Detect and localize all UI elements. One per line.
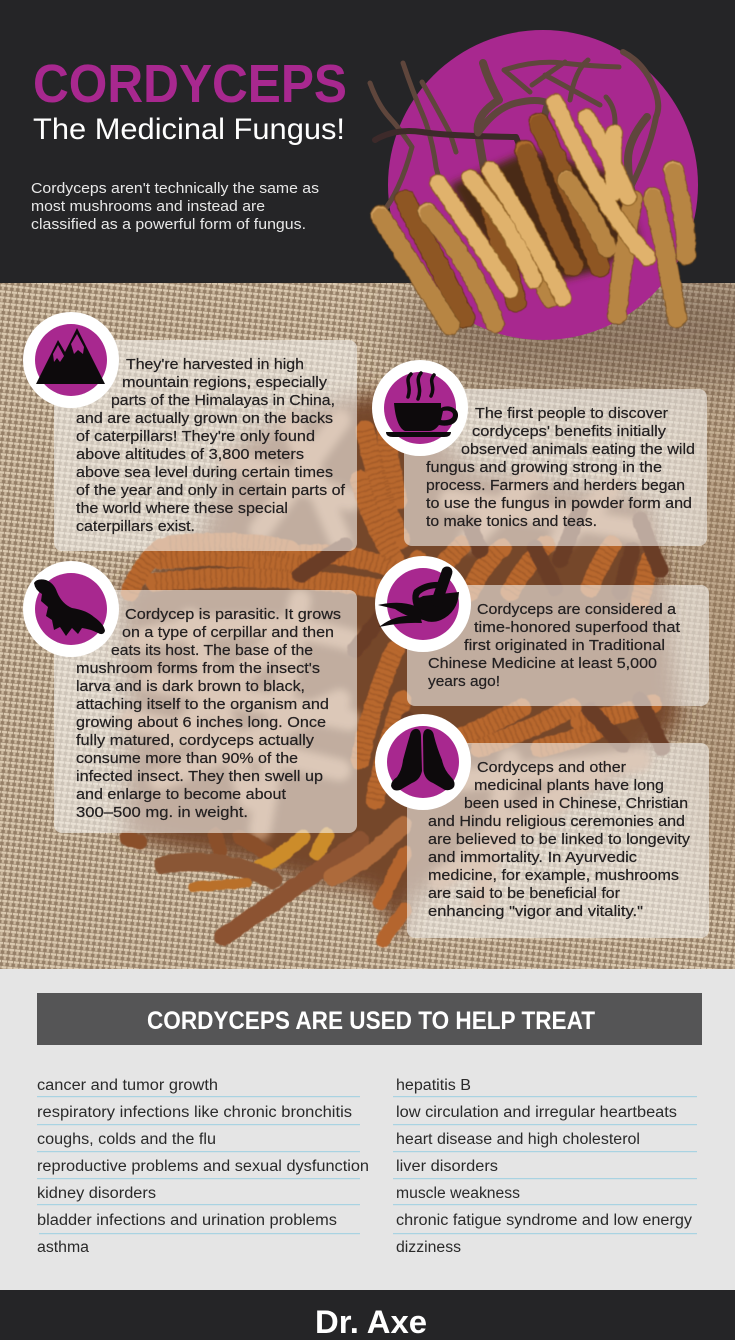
text block: first originated in Traditional [464, 637, 665, 654]
text block: They're harvested in high [126, 356, 304, 373]
panel: superfood [407, 585, 709, 706]
text block [428, 601, 681, 690]
panel: parasitic [54, 590, 357, 833]
text block: Cordycep is parasitic. It grows [125, 606, 341, 623]
text block: and immortality. In Ayurvedic [428, 849, 638, 866]
icon: caterpillar [23, 561, 119, 657]
list: left column: coughs, colds and the flu [37, 1131, 216, 1148]
list: left column: respiratory infections like chronic bronchitis [37, 1104, 352, 1121]
card [54, 590, 357, 833]
text block: 300–500 mg. in weight. [76, 804, 248, 821]
text block: above sea level during certain times [76, 464, 333, 481]
card [54, 340, 357, 551]
text block: on a type of cerpillar and then [122, 624, 334, 641]
text block: the world where these special [76, 500, 288, 517]
text block: Cordyceps are considered a [477, 601, 677, 618]
text block: to make tonics and teas. [426, 513, 597, 530]
text block [428, 759, 691, 920]
section heading bar [37, 993, 702, 1045]
list: left column: reproductive problems and sexual dysfunction [37, 1158, 369, 1175]
text block [76, 606, 341, 821]
text block [76, 356, 346, 535]
intro text: classified as a powerful form of fungus. [31, 216, 306, 233]
text block: medicinal plants have long [474, 777, 664, 794]
panel: first people to discover [404, 389, 707, 546]
card [407, 743, 709, 938]
text block: medicine, for example, mushrooms [428, 867, 679, 884]
pink circle behind fungus [388, 30, 698, 340]
text block: mountain regions, especially [122, 374, 328, 391]
title: CORDYCEPS [33, 54, 347, 114]
text block [426, 405, 695, 530]
text block: and Hindu religious ceremonies and [428, 813, 685, 830]
text block: of caterpillars! They're only found [76, 428, 315, 445]
list: right column: chronic fatigue syndrome and low energy [396, 1212, 692, 1229]
text block: The first people to discover [475, 405, 668, 422]
text block: of the year and only in certain parts of [76, 482, 346, 499]
text block: Chinese Medicine at least 5,000 [428, 655, 657, 672]
text block: parts of the Himalayas in China, [111, 392, 335, 409]
text block: and are actually grown on the backs [76, 410, 333, 427]
text block: mushroom forms from the insect's [76, 660, 320, 677]
list: right column [393, 1077, 697, 1256]
list: left column: kidney disorders [37, 1185, 156, 1202]
list: right column: low circulation and irregular heartbeats [396, 1104, 677, 1121]
panel: harvested in mountains [54, 340, 357, 551]
text block: infected insect. They then swell up [76, 768, 323, 785]
panel: religious ceremonies [407, 743, 709, 938]
text block: observed animals eating the wild [461, 441, 695, 458]
text block: years ago! [428, 673, 500, 690]
text block: larva and is dark brown to black, [76, 678, 305, 695]
text block: fully matured, cordyceps actually [76, 732, 315, 749]
worms below lower-left panel [127, 825, 405, 940]
card [404, 389, 707, 546]
text block: process. Farmers and herders began [426, 477, 685, 494]
icon: mountains [23, 312, 119, 408]
icon: steaming cup [372, 360, 468, 456]
list: left column: asthma [37, 1239, 89, 1256]
text block: and enlarge to become about [76, 786, 287, 803]
text block: been used in Chinese, Christian [464, 795, 688, 812]
list: right column: liver disorders [396, 1158, 498, 1175]
card [407, 585, 709, 706]
footer [0, 1290, 735, 1340]
fungus specimens photo [370, 52, 686, 325]
list: right column: dizziness [396, 1239, 461, 1256]
dark fungus stems [370, 52, 658, 213]
section heading bar: CORDYCEPS ARE USED TO HELP TREAT [147, 1007, 595, 1035]
intro text [31, 180, 319, 233]
text block: Cordyceps and other [477, 759, 626, 776]
text block: attaching itself to the organism and [76, 696, 329, 713]
list: right column: muscle weakness [396, 1185, 520, 1202]
text block: fungus and growing strong in the [426, 459, 662, 476]
icon: praying hands [375, 714, 471, 810]
list: right column: hepatitis B [396, 1077, 471, 1094]
intro text: Cordyceps aren't technically the same as [31, 180, 319, 197]
orange fungus bodies [405, 123, 600, 318]
text block: enhancing "vigor and vitality." [428, 903, 643, 920]
shadow backing between fungus bodies [450, 150, 640, 280]
text block: eats its host. The base of the [111, 642, 313, 659]
text block: to use the fungus in powder form and [426, 495, 692, 512]
section: uses list background [0, 969, 735, 1290]
text block: are believed to be linked to longevity [428, 831, 691, 848]
text block: above altitudes of 3,800 meters [76, 446, 304, 463]
intro text: most mushrooms and instead are [31, 198, 265, 215]
text block: are said to be beneficial for [428, 885, 620, 902]
burlap photo background [0, 270, 735, 970]
text block: consume more than 90% of the [76, 750, 298, 767]
list: left column: bladder infections and urination problems [37, 1212, 337, 1229]
icon: mortar and pestle [375, 556, 471, 652]
logo text: Dr. Axe [315, 1304, 427, 1340]
text block: growing about 6 inches long. Once [76, 714, 326, 731]
text block: time-honored superfood that [474, 619, 681, 636]
list: left column: cancer and tumor growth [37, 1077, 218, 1094]
text block: caterpillars exist. [76, 518, 195, 535]
list: right column: heart disease and high cholesterol [396, 1131, 640, 1148]
header background [0, 0, 735, 284]
subtitle: The Medicinal Fungus! [33, 113, 345, 146]
text block: cordyceps' benefits initially [472, 423, 667, 440]
list: left column [37, 1077, 369, 1256]
